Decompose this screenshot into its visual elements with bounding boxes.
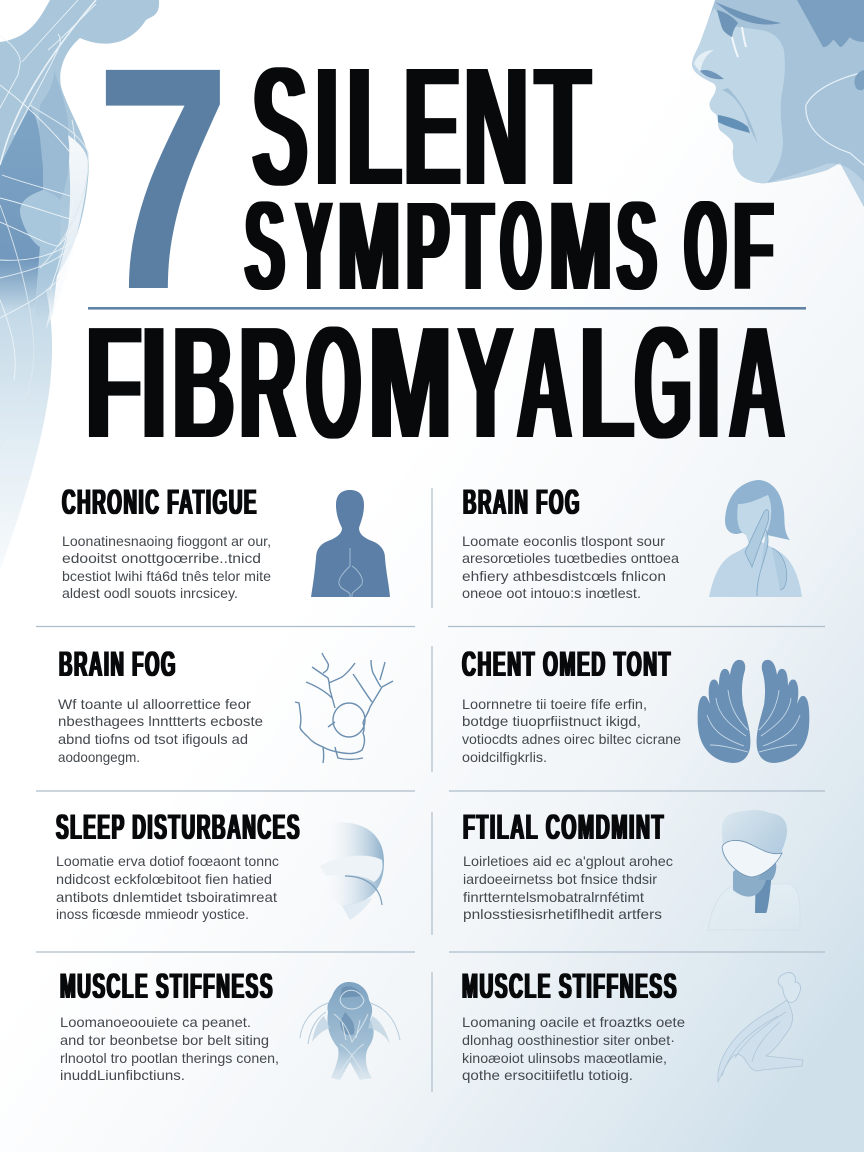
text block: botdge tiuoprfiistnuct ikigd, [462, 713, 641, 729]
title numeral: 7: 7 [99, 2, 227, 356]
icon: arm and joint [718, 973, 803, 1082]
text block: Loirletioes aid ec a'gplout arohec [463, 853, 673, 869]
panel: brain fog right [462, 480, 802, 601]
title line: FIBROMYALGIA: A [517, 291, 572, 474]
title line: SYMPTOMS OF: S [617, 175, 656, 318]
title line: FIBROMYALGIA: I [697, 291, 720, 474]
title line: SYMPTOMS OF: P [406, 175, 449, 318]
heading: SLEEP DISTURBANCES [56, 807, 301, 847]
face detail: mouth [718, 115, 750, 133]
text block: aodoongegm. [58, 749, 140, 765]
text block: rlnootol tro pootlan therings conen, [60, 1050, 279, 1066]
text block: iardoeeirnetss bot fnsice thdsir [463, 871, 657, 887]
text block: kinoæoiot ulinsobs maœotlamie, [462, 1050, 667, 1066]
title line: FIBROMYALGIA: O [306, 291, 361, 474]
text block: inuddLiunfibctiuns. [60, 1067, 185, 1083]
text block: Loonatinesnaoing fioggont ar our, [62, 533, 271, 549]
face detail: jaw line [806, 72, 864, 165]
text block [56, 853, 279, 922]
title line: SYMPTOMS OF: M [549, 175, 612, 318]
panel: brain fog left [58, 644, 393, 765]
text block: Loornnetre tii toeire fífe erfin, [462, 696, 647, 712]
left hand [698, 660, 750, 763]
title line: SYMPTOMS OF: O [501, 175, 541, 318]
title line: SILENT: I [315, 29, 338, 223]
face detail: lit lower face [692, 8, 785, 183]
heading: FTILAL COMDMINT [463, 807, 665, 847]
text block [462, 533, 679, 601]
face detail: nose [694, 50, 714, 72]
title line: SYMPTOMS OF: Y [296, 175, 332, 318]
divider row 2 left [36, 790, 415, 792]
text block: abnd tiofns od tsot ifigouls ad [58, 731, 248, 747]
heading: MUSCLE STIFFNESS [462, 966, 678, 1006]
divider row 3 right [449, 951, 825, 953]
title line: SILENT: E [404, 29, 461, 223]
title line: FIBROMYALGIA: I [142, 291, 166, 474]
icon: body silhouette [311, 490, 390, 597]
title: A [729, 291, 785, 474]
panel: muscle stiffness right [462, 966, 803, 1083]
text block [58, 696, 263, 765]
text block: dlonhag oosthinestior siter onbet· [462, 1032, 675, 1048]
vertical dividers [431, 488, 433, 1092]
title rule [88, 307, 806, 310]
divider row 3 left [36, 951, 415, 953]
title line: FIBROMYALGIA: Y [457, 291, 514, 474]
panel: ftilal comdmint [463, 807, 800, 930]
title line: SYMPTOMS OF: T [453, 175, 493, 318]
title line: FIBROMYALGIA: M [368, 291, 452, 474]
panel: chronic fatigue [62, 482, 390, 601]
title line: SYMPTOMS OF: S [245, 175, 284, 318]
divider row 2 right [449, 790, 825, 792]
text block: and tor beonbetse bor belt siting [60, 1032, 269, 1048]
title line: SILENT: L [347, 29, 402, 223]
heading: CHENT OMED TONT [462, 644, 672, 684]
text block: ooidcilfigkrlis. [462, 749, 547, 765]
title line: SILENT: N [464, 29, 529, 223]
heading: MUSCLE STIFFNESS [60, 966, 274, 1006]
text block: aldest oodl souots inrcsicey. [62, 585, 238, 601]
torso detail: mid-blue chest side [39, 70, 69, 200]
right hand [757, 660, 809, 763]
title line: FIBROMYALGIA: B [172, 291, 234, 474]
text block [463, 853, 673, 922]
text block: oneoe oot intouo:s inœtlest. [462, 585, 641, 601]
face detail: neck highlight [767, 163, 864, 207]
heading: CHRONIC FATIGUE [62, 482, 258, 522]
title line: FIBROMYALGIA: L [580, 291, 634, 474]
icon: woman holding head [709, 480, 802, 597]
text block: edooitst onottgoœrribe..tnicd [62, 550, 261, 566]
text block: antibots dnlemtidet tsboiratimreat [56, 889, 277, 905]
icon: muscle anatomy [300, 982, 400, 1080]
text block: pnlosstiesisrhetiflhedit artfers [463, 906, 662, 922]
text block: Loomatie erva dotiof foœaont tonnc [56, 853, 279, 869]
torso detail: lighter inner band [20, 190, 61, 320]
divider row 1 right [448, 626, 825, 628]
torso detail: whitened rib side [46, 133, 88, 330]
text block [60, 1014, 279, 1083]
face detail: hair [797, 0, 864, 47]
text block [462, 1014, 685, 1083]
text block [62, 533, 271, 601]
text block: bcestiot lwihi ftá6d tnês telor mite [62, 568, 271, 584]
face detail: eye and brow [715, 2, 781, 25]
text block: aresorœtioles tuœtbedies onttoea [462, 550, 679, 566]
torso detail: white nerve lines [0, 0, 96, 448]
text block: finrtterntelsmobatralrnfétimt [463, 889, 644, 905]
title line: SYMPTOMS OF: O [685, 175, 726, 318]
illustration: anatomical torso at left [0, 0, 159, 570]
icon: child with covered face [708, 810, 800, 930]
title line: FIBROMYALGIA: F [86, 291, 142, 474]
text block: ehfiery athbesdistcœls fnlicon [462, 568, 666, 584]
heading: BRAIN FOG [59, 644, 177, 684]
divider row 1 left [36, 626, 415, 628]
text block: Loomaning oacile et froaztks oete [462, 1014, 685, 1030]
icon: nerve branches [295, 653, 393, 763]
heading: BRAIN FOG [463, 482, 581, 522]
text block: Loomanoeoouiete ca peanet. [60, 1014, 251, 1030]
text block: votiocdts adnes oirec biltec cicrane [462, 731, 681, 747]
title line: SILENT: S [252, 29, 308, 223]
panel: sleep disturbances [56, 807, 384, 922]
text block: ndidcost eckfolœbitoot fien hatied [56, 871, 272, 887]
illustration: pained face at top right [692, 0, 864, 207]
panel: muscle stiffness left [60, 966, 400, 1083]
title line: SYMPTOMS OF: F [733, 175, 773, 318]
text block: Loomate eoconlis tlospont sour [462, 533, 665, 549]
title line: SILENT: T [535, 29, 590, 223]
text block: Wf toante ul alloorrettice feor [58, 696, 251, 712]
torso detail: darker chest core [0, 107, 43, 310]
title line: SYMPTOMS OF: M [338, 175, 400, 318]
text block: inoss ficœsde mmieodr yostice. [56, 906, 249, 922]
text block [462, 696, 681, 765]
icon: sleep sphere [320, 822, 384, 920]
title line: FIBROMYALGIA: G [635, 291, 692, 474]
face detail: tear highlights [732, 27, 746, 57]
icon: pair of hands [698, 660, 809, 763]
text block: nbesthagees lnnttterts ecboste [58, 713, 263, 729]
face detail: nasolabial shade [722, 88, 758, 144]
title line: FIBROMYALGIA: R [239, 291, 296, 474]
title [86, 2, 806, 474]
panel: chent omed tont [462, 644, 809, 765]
text block: qothe ersocitiifetlu totioig. [462, 1067, 633, 1083]
